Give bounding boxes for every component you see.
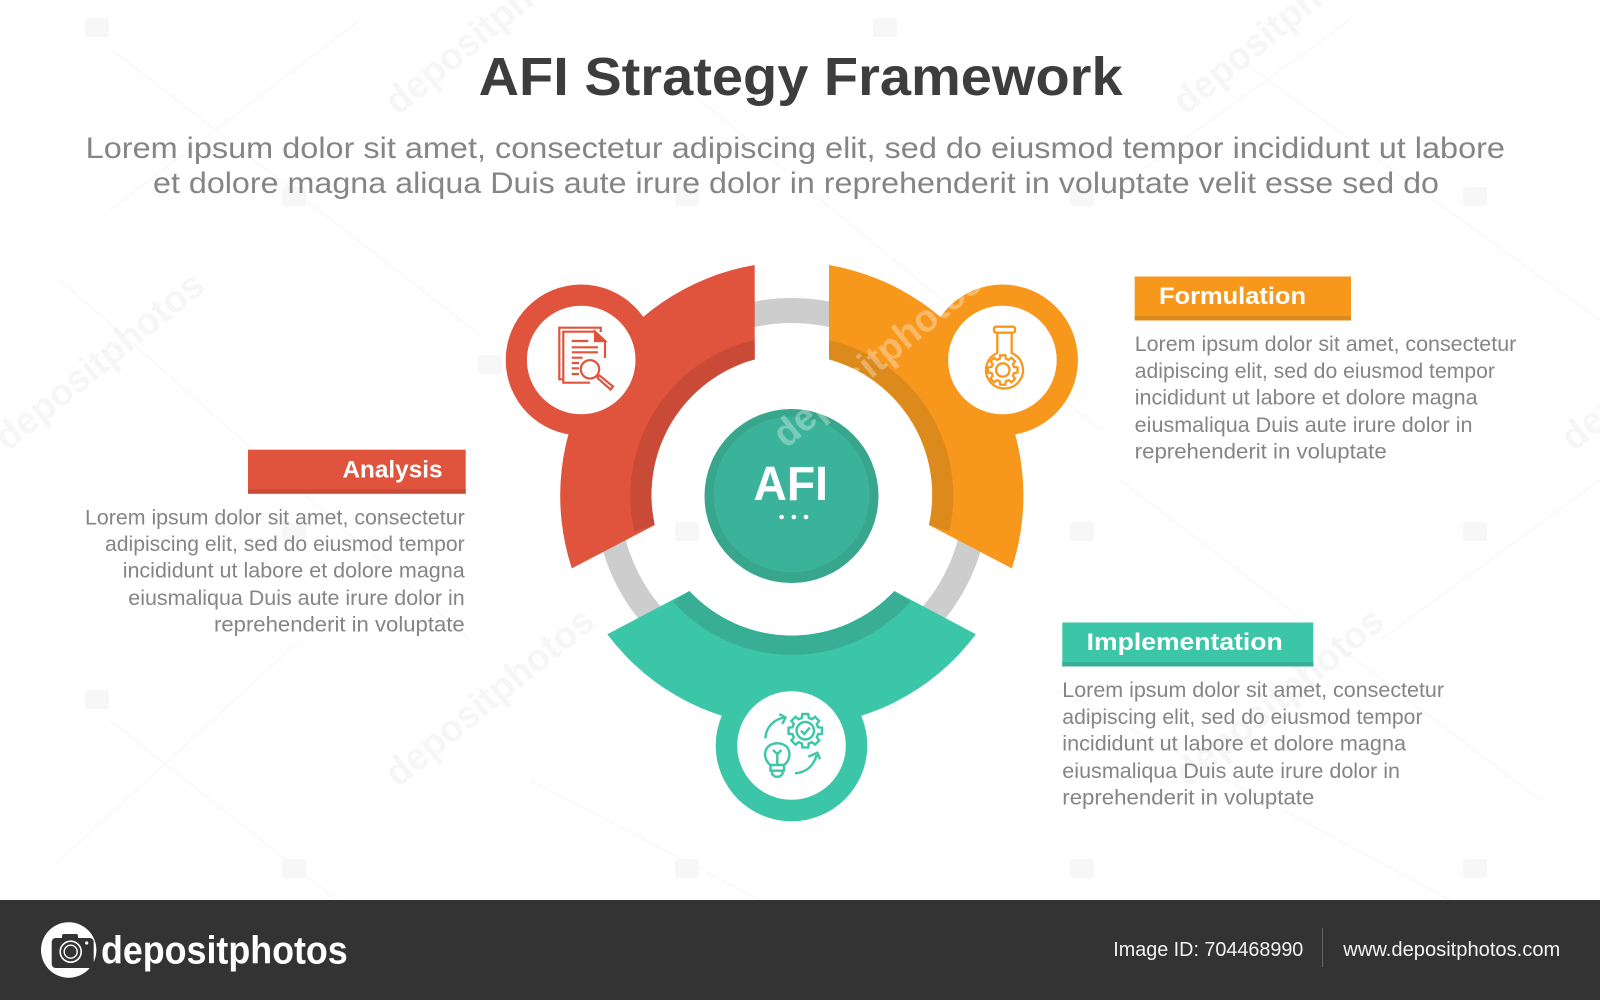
text block: analysis: adipiscing elit, sed do eiusmod tempor [105, 532, 465, 556]
subtitle text: et dolore magna aliqua Duis aute irure dolor in reprehenderit in voluptate velit esse sed do [153, 167, 1439, 200]
text block: formulation: Lorem ipsum dolor sit amet, consectetur [1135, 332, 1516, 356]
heading bar: analysis [248, 450, 466, 494]
text block: formulation: adipiscing elit, sed do eiusmod tempor [1135, 359, 1495, 383]
text block: formulation [1135, 332, 1516, 464]
heading bar: implementation: Implementation [1087, 629, 1283, 656]
icon: gear, bulb and cycle arrows [765, 714, 822, 777]
icon: flask with gear [986, 327, 1023, 389]
text block: formulation: eiusmaliqua Duis aute irure dolor in [1135, 413, 1472, 437]
text block: implementation [1062, 678, 1444, 810]
text block: formulation: reprehenderit in voluptate [1135, 440, 1387, 464]
watermark: camera marks [85, 18, 1487, 878]
text block: implementation: Lorem ipsum dolor sit amet, consectetur [1062, 678, 1444, 702]
grey ring [607, 310, 976, 680]
segment: implementation (green) [607, 591, 976, 821]
text block: analysis: Lorem ipsum dolor sit amet, consectetur [85, 505, 465, 529]
watermark: diagonal wordmarks: depositphotos [1167, 600, 1393, 795]
footer image id: Image ID: 704468990 [1113, 939, 1303, 961]
footer url: www.depositphotos.com [1342, 939, 1560, 961]
segment: formulation (orange) [829, 265, 1078, 568]
text block: implementation: incididunt ut labore et dolore magna [1062, 732, 1406, 756]
subtitle text: Lorem ipsum dolor sit amet, consectetur adipiscing elit, sed do eiusmod tempor incididunt ut labore [86, 132, 1505, 165]
heading bar: formulation: Formulation [1159, 283, 1306, 310]
heading bar: formulation [1135, 276, 1351, 320]
panel: formulation [1135, 276, 1516, 464]
panel: implementation [1062, 622, 1444, 810]
heading bar: analysis: Analysis [342, 456, 442, 483]
footer bar [0, 900, 1600, 1000]
central cycle diagram [506, 265, 1078, 821]
text block: analysis: eiusmaliqua Duis aute irure dolor in [128, 586, 465, 610]
center circle [704, 409, 878, 583]
text block: analysis [85, 505, 465, 637]
heading bar: implementation [1062, 622, 1313, 666]
text block: implementation: reprehenderit in voluptate [1062, 786, 1314, 810]
panel: analysis [85, 450, 466, 637]
text block: implementation: eiusmaliqua Duis aute irure dolor in [1062, 759, 1400, 783]
text block: analysis: reprehenderit in voluptate [214, 613, 465, 637]
title: AFI Strategy Framework [479, 47, 1124, 107]
segment: analysis (red) [506, 265, 755, 568]
watermark: diagonal wordmarks [0, 0, 1600, 795]
watermark: diagonal wordmarks: depositphotos [377, 600, 603, 795]
icon: document with magnifier [559, 328, 613, 390]
footer wordmark: depositphotos [101, 929, 348, 972]
text block: analysis: incididunt ut labore et dolore magna [123, 559, 465, 583]
watermark over diagram: depositphotos [765, 261, 991, 456]
icon: footer camera logo [41, 922, 96, 978]
text block: formulation: incididunt ut labore et dolore magna [1135, 386, 1478, 410]
subtitle text [86, 132, 1505, 200]
text block: implementation: adipiscing elit, sed do eiusmod tempor [1062, 705, 1422, 729]
center circle: AFI [754, 458, 828, 511]
